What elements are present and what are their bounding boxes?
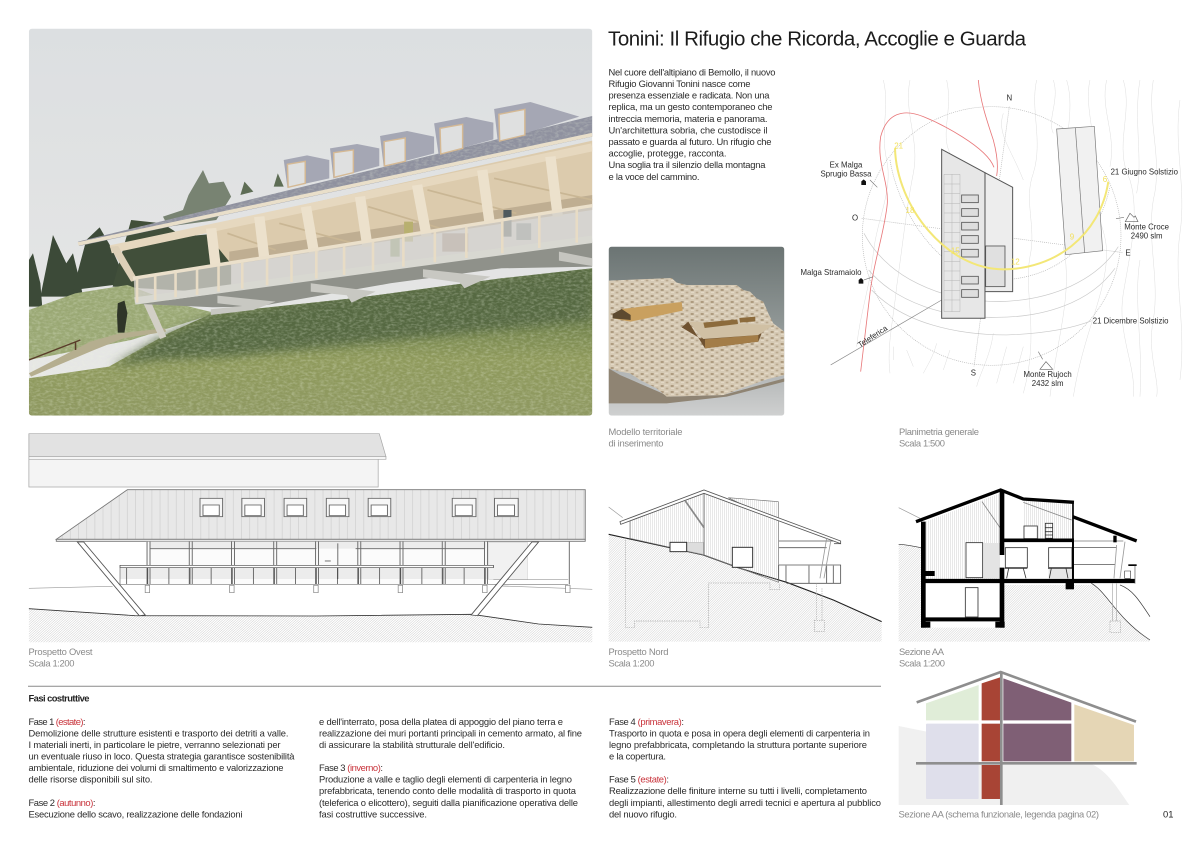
photo: exterior render of the refuge	[29, 29, 594, 417]
text column 1: I materiali inerti, in particolare le pietre, verranno selezionati per	[28, 739, 280, 750]
caption: model: di inserimento	[608, 438, 664, 449]
dashed foundations	[625, 540, 824, 632]
north roof	[620, 490, 841, 544]
scheme: structure lines	[916, 672, 1137, 805]
lower slanted strut	[144, 304, 166, 339]
diagram: functional section scheme	[899, 672, 1137, 805]
place labels: Monte Rujoch	[1023, 370, 1072, 379]
stepped terrain	[609, 278, 784, 397]
ground floor facade	[120, 542, 569, 584]
compass circle and axes	[862, 107, 1123, 367]
caption: section AA: Scala 1:200	[899, 658, 945, 669]
text column 1: ambientale, riduzione dei volumi di smaltimento e valorizzazione	[28, 762, 284, 773]
text column 3: e la copertura.	[609, 751, 666, 762]
sun hour labels: 12	[1011, 258, 1020, 267]
north windows	[670, 542, 753, 567]
place labels: Ex Malga	[830, 161, 863, 170]
main roof	[56, 490, 585, 541]
text column 3: degli impianti, allestimento degli arredi tecnici e apertura al pubblico	[609, 797, 881, 808]
caption: north elevation: Prospetto Nord	[608, 646, 668, 657]
site plan	[801, 80, 1182, 397]
footings	[145, 585, 570, 593]
compass labels: E	[1125, 249, 1131, 258]
text column 3	[609, 716, 881, 820]
page number: 01	[1163, 809, 1173, 820]
compass labels	[852, 93, 1131, 378]
caption: west elevation: Prospetto Ovest	[28, 646, 93, 657]
balcony railing	[120, 565, 568, 584]
scheme: ground	[899, 726, 1129, 805]
text column 2: e dell'interrato, posa della platea di appoggio del piano terra e	[319, 716, 563, 727]
title: Tonini: Il Rifugio che Ricorda, Accoglie e Guarda	[608, 27, 1027, 50]
caption: west elevation	[28, 646, 93, 669]
sun hour labels: 6	[1103, 175, 1108, 184]
text column 1: un eventuale riuso in loco. Questa strategia garantisce sostenibilità	[28, 751, 295, 762]
photo: territorial model	[609, 247, 784, 416]
scheme: green zone	[926, 685, 979, 720]
text column 2: fasi costruttive successive.	[319, 809, 427, 820]
interior hatching	[925, 493, 1114, 579]
intro text block: Nel cuore dell'altipiano di Bemollo, il nuovo	[608, 66, 776, 78]
intro text block: presenza essenziale e radicata. Non una	[608, 90, 770, 100]
interior furnishings	[965, 523, 1131, 617]
sun path	[895, 148, 1108, 269]
dormers	[200, 498, 518, 517]
caption: section AA: Sezione AA	[899, 646, 945, 657]
refuge plan	[942, 149, 1013, 318]
caption: site plan	[899, 426, 979, 449]
text column 2: (teleferica o elicottero), seguiti dalla pianificazione operativa delle	[319, 797, 578, 808]
text column 1: delle risorse disponibili sul sito.	[28, 774, 152, 785]
place labels: 2432 slm	[1032, 379, 1064, 388]
text column 3: Trasporto in quota e posa in opera degli elementi di carpenteria in	[609, 727, 870, 738]
text column 3: del nuovo rifugio.	[609, 809, 677, 820]
text column 2: Fase 3 (inverno):	[319, 762, 383, 773]
caption: north elevation	[608, 646, 668, 669]
place labels: 2490 slm	[1131, 232, 1163, 241]
place labels: 21 Giugno Solstizio	[1111, 168, 1179, 177]
place labels: Sprugio Bassa	[821, 170, 872, 179]
compass labels: S	[971, 369, 976, 378]
sun hour labels: 15	[951, 247, 960, 256]
intro text block: replica, ma un gesto contemporaneo che	[608, 101, 772, 112]
north facade walls	[630, 493, 779, 582]
cut ground hatch	[899, 544, 1150, 642]
back hillside	[29, 285, 216, 360]
text column 2: di assicurare la stabilità strutturale dell'edificio.	[319, 739, 505, 750]
scheme: lavender zone	[926, 724, 979, 799]
text column 1: Fase 2 (autunno):	[28, 797, 96, 808]
sun hour labels: 9	[1070, 233, 1075, 242]
roof and dormers	[76, 102, 594, 247]
slanted struts	[77, 542, 539, 616]
caption: section AA	[899, 646, 945, 669]
caption: north elevation: Scala 1:200	[608, 658, 654, 669]
text column 3: Fase 4 (primavera):	[609, 716, 684, 727]
text column 1: Demolizione delle strutture esistenti e trasporto dei detriti a valle.	[28, 727, 288, 738]
trees behind the building	[29, 170, 284, 307]
ground hatch	[29, 609, 592, 642]
intro text block: Rifugio Giovanni Tonini nasce come	[608, 78, 750, 89]
sun hour labels: 18	[906, 206, 915, 215]
text column 1: Fase 1 (estate):	[28, 716, 86, 727]
cut black structure	[916, 490, 1137, 628]
model base shadow	[609, 368, 784, 403]
drawing: north elevation	[609, 490, 882, 642]
intro text block: e la voce del cammino.	[608, 171, 700, 182]
wooden ceiling and interior	[110, 141, 592, 282]
intro text block: accoglie, protegge, racconta.	[608, 148, 726, 159]
intro text block: intreccia memoria, materia e panorama.	[608, 113, 768, 124]
north terrace	[779, 538, 841, 583]
text column 1: Esecuzione dello scavo, realizzazione delle fondazioni	[28, 809, 242, 820]
compass labels: O	[852, 213, 858, 222]
caption: site plan: Scala 1:500	[899, 438, 945, 449]
red route	[861, 80, 997, 372]
text column 2: prefabbricata, tenendo conto delle modalità di trasporto in quota	[319, 785, 577, 796]
neighbouring building	[1057, 126, 1103, 255]
foreground grass slope	[29, 268, 592, 416]
hillside hatch	[609, 534, 882, 642]
terrace guests	[390, 210, 531, 257]
intro text block	[608, 66, 776, 182]
text column 3: Fase 5 (estate):	[609, 774, 669, 785]
drawing: west elevation	[29, 434, 592, 642]
text column 2	[319, 716, 582, 820]
lower model building	[682, 317, 773, 348]
compass labels: N	[1006, 93, 1012, 102]
place labels: 21 Dicembre Solstizio	[1093, 317, 1169, 326]
text column 2: Produzione a valle e taglio degli elementi di carpenteria in legno	[319, 774, 572, 785]
scheme: purple zone	[1003, 678, 1071, 761]
place labels: Teleferica	[856, 323, 890, 349]
divider line	[28, 685, 881, 687]
text column 2: realizzazione dei muri portanti principali in cemento armato, al fine	[319, 727, 582, 738]
map icons	[859, 179, 1138, 369]
text column 3: Realizzazione delle finiture interne su tutti i livelli, completamento	[609, 785, 867, 796]
scheme: red circulation zone	[982, 677, 1000, 799]
terrace balustrade	[133, 205, 592, 303]
upper model building	[613, 302, 683, 322]
intro text block: Un'architettura sobria, che custodisce il	[608, 124, 768, 135]
drawing: section AA	[899, 490, 1150, 642]
timber columns	[211, 157, 558, 266]
scheme: tan zone	[1074, 704, 1134, 761]
path and stairs	[29, 328, 166, 377]
place labels: Monte Croce	[1124, 223, 1169, 232]
contour lines	[857, 80, 1182, 397]
intro text block: passato e guarda al futuro. Un rifugio che	[608, 136, 772, 147]
text column 3: legno prefabbricata, completando la struttura portante superiore	[609, 739, 867, 750]
caption: west elevation: Scala 1:200	[28, 658, 74, 669]
place labels: Malga Stramaiolo	[801, 268, 862, 277]
teleferica line	[831, 300, 942, 365]
solstice arcs	[864, 233, 1118, 335]
background building	[29, 434, 386, 487]
hiker figure	[117, 301, 127, 333]
caption: model: Modello territoriale	[608, 426, 682, 437]
sun hour labels: 21	[894, 141, 904, 150]
sun hour labels	[894, 141, 1108, 267]
intro text block: Una soglia tra il silenzio della montagna	[608, 159, 766, 170]
heading: construction phases: Fasi costruttive	[28, 692, 90, 704]
caption: site plan: Planimetria generale	[899, 426, 979, 437]
text column 1	[28, 716, 295, 820]
place labels	[801, 161, 1179, 388]
dashed pier	[1110, 566, 1135, 632]
caption: model	[608, 426, 682, 449]
caption: functional section: Sezione AA (schema funzionale, legenda pagina 02)	[898, 809, 1099, 820]
concrete underside and beams	[140, 242, 592, 315]
